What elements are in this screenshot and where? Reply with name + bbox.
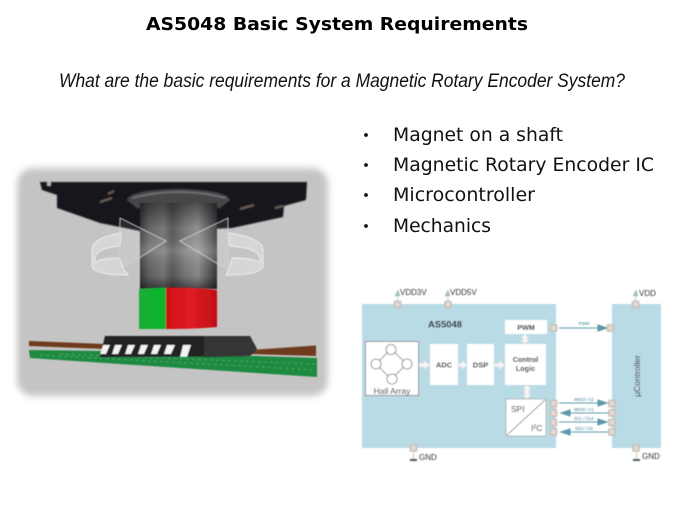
- PWM block: PWM: [517, 323, 535, 332]
- bullet list: Mechanics: [393, 215, 491, 237]
- photo: magnet above encoder chip: [17, 168, 328, 396]
- control logic block: Logic: [516, 364, 535, 373]
- control logic block: Control: [513, 355, 538, 364]
- SPI / I2C block: SPI: [511, 404, 525, 414]
- signal arrows: [559, 325, 609, 435]
- encoder chip: [100, 336, 257, 357]
- microcontroller block: µController: [632, 355, 642, 397]
- SPI / I2C block: I²C: [531, 423, 542, 433]
- photo background panel: [17, 168, 328, 396]
- block diagram: [362, 288, 661, 462]
- title: AS5048 Basic System Requirements: [146, 14, 528, 35]
- power labels: VDD3V: [400, 288, 427, 297]
- microcontroller block: [612, 304, 661, 448]
- power symbols: [395, 290, 640, 461]
- signal labels: [574, 321, 594, 431]
- AS5048 block: [362, 304, 556, 448]
- internal arrows: [419, 334, 532, 399]
- connection pads: [394, 301, 640, 452]
- PWM block: [505, 320, 547, 334]
- hall array: [366, 342, 418, 396]
- bullet list: [364, 124, 654, 237]
- power labels: VDD5V: [450, 288, 477, 297]
- bullet list: Magnetic Rotary Encoder IC: [393, 154, 654, 176]
- bullet list: Magnet on a shaft: [393, 124, 563, 146]
- ADC block: ADC: [436, 360, 453, 370]
- DSP block: DSP: [473, 360, 488, 370]
- left arrow: [92, 218, 166, 275]
- magnet: [139, 288, 217, 329]
- SPI / I2C block: [506, 399, 546, 436]
- power labels: GND: [642, 452, 660, 461]
- signal labels: SCL / CLK: [574, 416, 594, 421]
- power labels: VDD: [639, 289, 656, 298]
- subtitle question: What are the basic requirements for a Magnetic Rotary Encoder System?: [59, 70, 625, 92]
- chip name: AS5048: [428, 320, 462, 330]
- circuit board: [29, 341, 317, 377]
- bullet list: Microcontroller: [393, 184, 535, 206]
- power labels: GND: [419, 453, 437, 462]
- signal labels: PWM: [579, 321, 590, 326]
- right arrow: [180, 218, 263, 275]
- mounting plate: [40, 182, 307, 232]
- signal labels: SDA / SS: [575, 426, 593, 431]
- control logic block: [505, 344, 546, 385]
- DSP block: [467, 344, 494, 385]
- rotation arrows: [92, 218, 263, 275]
- ADC block: [430, 344, 458, 385]
- hall array: Hall Array: [374, 386, 411, 396]
- signal labels: MOSI / A1: [574, 407, 594, 412]
- signal labels: MISO / A2: [574, 397, 594, 402]
- shaft: [140, 203, 217, 289]
- power labels: [400, 288, 660, 462]
